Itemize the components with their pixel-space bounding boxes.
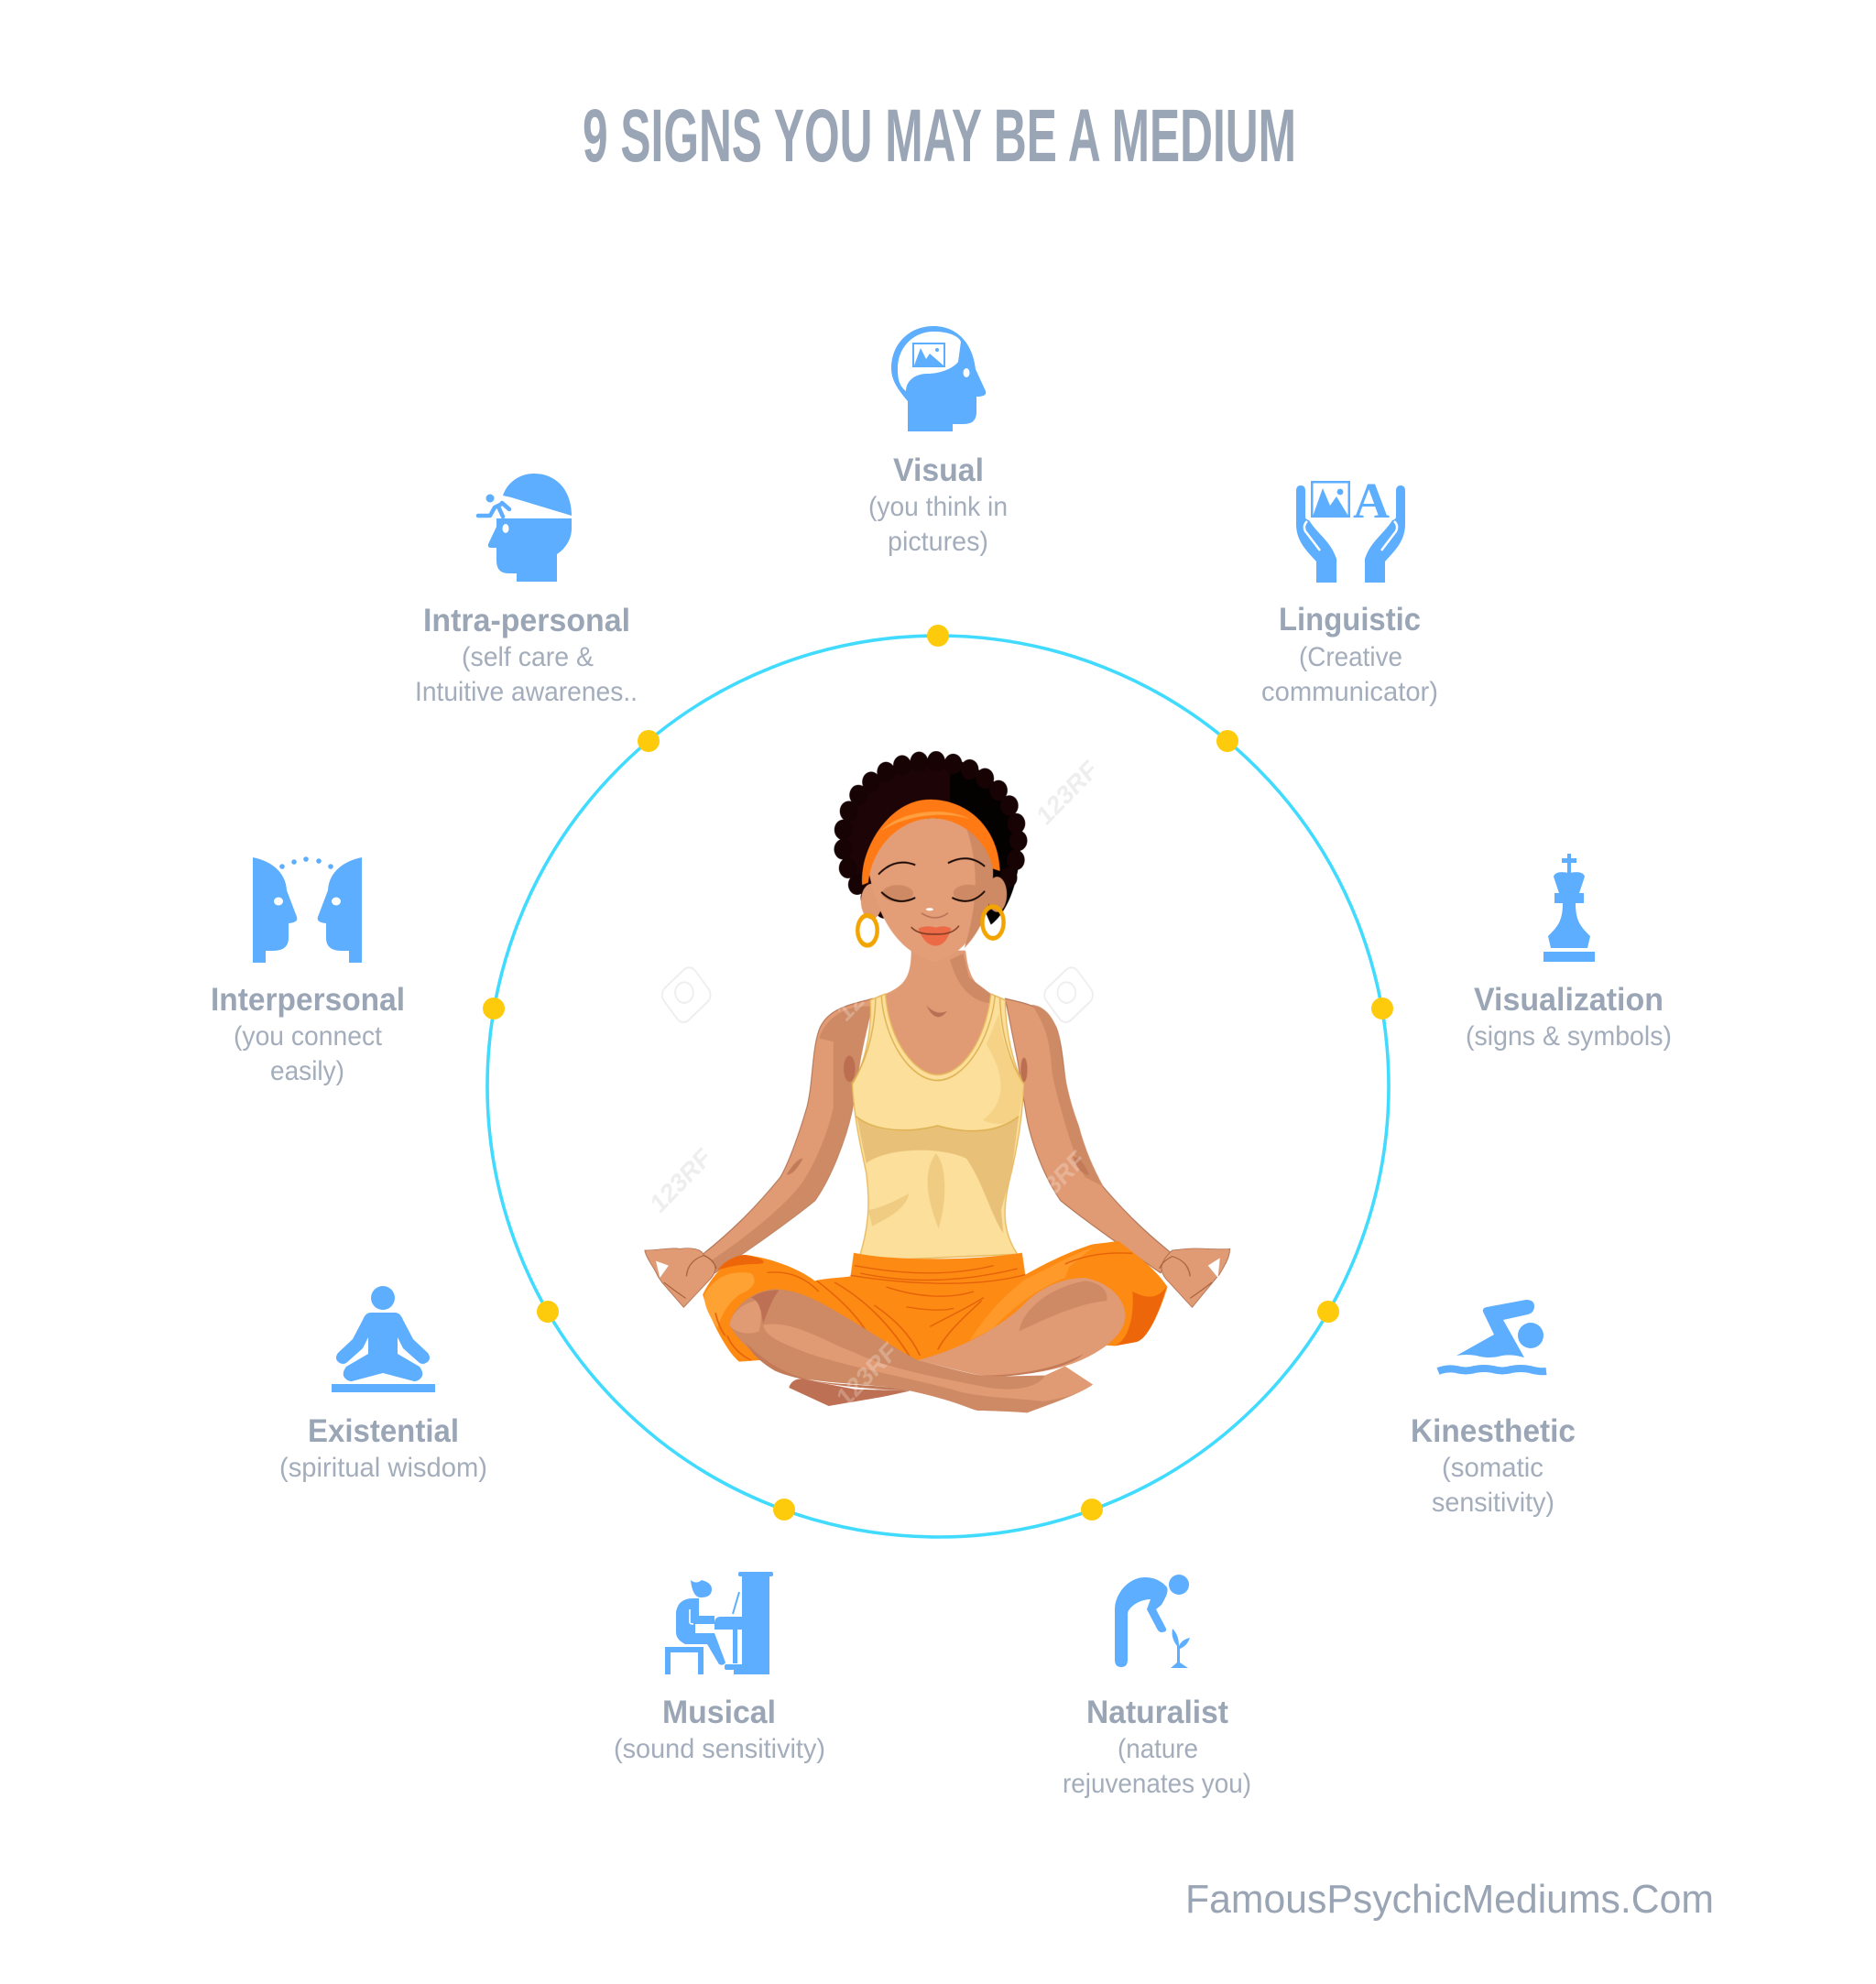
icon: person bending to plant [1115, 1575, 1190, 1668]
hair [843, 758, 1020, 925]
description: (nature [1118, 1734, 1198, 1764]
description: (somatic [1442, 1453, 1543, 1483]
heading: Visual [893, 452, 984, 488]
title: 9 SIGNS YOU MAY BE A MEDIUM [583, 94, 1296, 178]
heading: Kinesthetic [1411, 1413, 1576, 1449]
description: (sound sensitivity) [614, 1734, 825, 1764]
watermarks: 123RF [1031, 754, 1103, 831]
heading: Existential [308, 1413, 459, 1449]
sign: Existential [279, 1286, 487, 1483]
icon: hands holding picture and letter [1296, 473, 1405, 583]
description: (Creative [1299, 642, 1402, 672]
overlay watermarks on figure [832, 951, 1090, 1412]
overlay watermarks on figure: 123RF [832, 1335, 902, 1412]
sign: Musical [614, 1572, 825, 1764]
sign: Linguistic [1261, 473, 1438, 707]
description [868, 492, 1008, 557]
rear foot [789, 1379, 911, 1406]
description: (spiritual wisdom) [279, 1453, 487, 1483]
description [234, 1021, 383, 1086]
icon: swimmer [1438, 1300, 1546, 1371]
arms and shoulders [703, 998, 1172, 1273]
left hand [645, 1248, 716, 1307]
icon: head with picture [891, 326, 986, 431]
description: easily) [270, 1056, 344, 1086]
description: rejuvenates you) [1063, 1769, 1251, 1799]
watermarks [646, 754, 1103, 1219]
description [415, 642, 638, 707]
heading: Linguistic [1279, 602, 1421, 638]
description [1261, 642, 1438, 707]
icon: meditating figure [332, 1286, 435, 1392]
overlay watermarks on figure: 123RF [832, 951, 902, 1027]
icon: hands holding picture and letter: A [1353, 473, 1390, 529]
description [1432, 1453, 1554, 1518]
description: (you connect [234, 1021, 383, 1052]
sign: Interpersonal [211, 856, 405, 1086]
sign: Kinesthetic [1411, 1300, 1576, 1518]
trousers, legs and hands [645, 1241, 1230, 1412]
watermarks: 123RF [646, 1142, 716, 1219]
neck and chest [886, 951, 991, 1084]
ring with nine nodes [483, 625, 1393, 1537]
sign: Visual [868, 326, 1008, 557]
icon: chess king [1543, 854, 1595, 962]
sign: Visualization [1466, 854, 1672, 1052]
left knee leg crossing to foot [729, 1289, 1093, 1412]
description [1063, 1734, 1251, 1799]
icon: head with running figure [478, 474, 572, 582]
description: sensitivity) [1432, 1488, 1554, 1518]
sign: Naturalist [1063, 1575, 1251, 1799]
right hand [1160, 1248, 1230, 1307]
description: (self care & [462, 642, 594, 672]
icon: two faces with dots [253, 856, 362, 963]
heading: Intra-personal [423, 603, 630, 638]
description: Intuitive awarenes.. [415, 677, 638, 707]
meditating woman illustration [645, 754, 1230, 1412]
icon: person playing upright piano [668, 1572, 773, 1674]
heading: Naturalist [1086, 1695, 1228, 1730]
tank top [852, 994, 1023, 1261]
face [857, 800, 1007, 962]
description: communicator) [1261, 677, 1438, 707]
heading: Visualization [1474, 982, 1663, 1018]
heading: Musical [662, 1695, 776, 1730]
heading: Interpersonal [211, 982, 405, 1018]
overlay watermarks on figure: 123RF [1020, 1144, 1090, 1221]
sign: Intra-personal [415, 474, 638, 707]
description: (you think in [868, 492, 1008, 522]
description: (signs & symbols) [1466, 1021, 1672, 1052]
right knee leg [918, 1278, 1126, 1377]
orange trousers [703, 1241, 1168, 1362]
source credit: FamousPsychicMediums.Com [1185, 1877, 1714, 1922]
description: pictures) [888, 527, 988, 557]
